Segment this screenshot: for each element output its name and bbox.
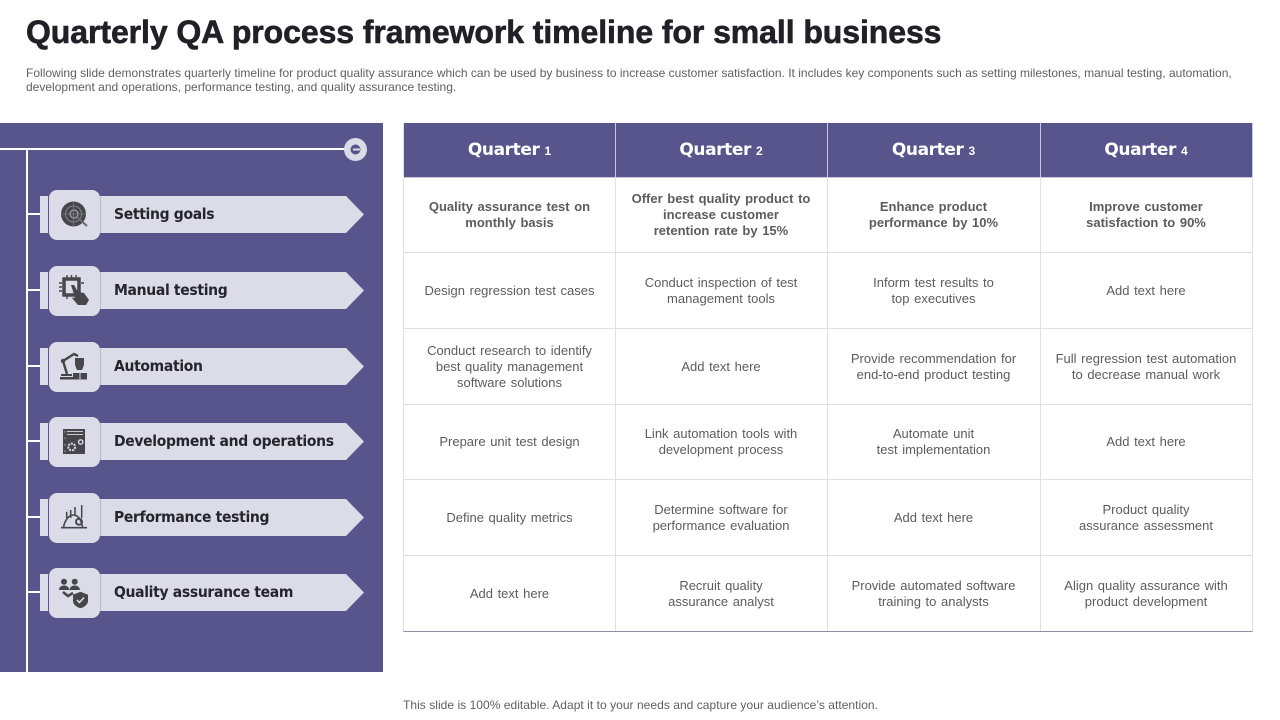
- icon: gauge with bars: [49, 493, 100, 543]
- table: quarterly plan: [403, 123, 1253, 632]
- table: quarterly plan: assurance analyst: [668, 594, 774, 609]
- table: quarterly plan: Inform test results to: [873, 275, 994, 290]
- header: quarter 1: Quarter 1: [468, 140, 551, 160]
- header: quarter 4: [1040, 123, 1253, 178]
- table: quarterly plan: Add text here: [470, 586, 549, 601]
- item: quality assurance team: [40, 568, 364, 618]
- table: quarterly plan: software solutions: [457, 375, 562, 390]
- table: quarterly plan: Align quality assurance with: [1064, 578, 1228, 593]
- label: Performance testing: [114, 508, 269, 526]
- table: quarterly plan: top executives: [891, 291, 976, 306]
- table: quarterly plan: Automate unit: [893, 426, 974, 441]
- header: quarter 1: [403, 123, 616, 178]
- item: development and operations: [40, 417, 364, 467]
- item: setting goals: [40, 190, 364, 240]
- label: Development and operations: [114, 432, 334, 450]
- panel: QA components timeline: [0, 123, 383, 672]
- icon: chip with pointing hand: [49, 266, 100, 316]
- table: quarterly plan: Define quality metrics: [446, 510, 573, 525]
- table: quarterly plan: Add text here: [681, 359, 761, 374]
- header: quarter 2: Quarter 2: [679, 140, 763, 160]
- header: quarter 3: [827, 123, 1041, 178]
- table: quarterly plan: Prepare unit test design: [439, 434, 580, 449]
- icon: target with magnifier: [49, 190, 100, 240]
- table: quarterly plan: Conduct research to identify: [427, 343, 592, 358]
- table: quarterly plan: best quality management: [436, 359, 583, 374]
- table: quarterly plan: monthly basis: [465, 214, 554, 230]
- table: quarterly plan: Quality assurance test on: [429, 198, 590, 214]
- table: quarterly plan: to decrease manual work: [1072, 367, 1220, 382]
- icon: robot arm and boxes: [49, 342, 100, 392]
- label: Setting goals: [114, 205, 214, 223]
- label: Quality assurance team: [114, 583, 293, 601]
- table: quarterly plan: Add text here: [1106, 283, 1186, 298]
- title: Quarterly QA process framework timeline for small business: [26, 14, 941, 50]
- intro text: Following slide demonstrates quarterly timeline for product quality assurance which can be used by business to increase customer satisfaction. It includes key components such as setting milestones, manual testing, automation, development and operations, performance testing, and quality assurance testing.: [26, 66, 1232, 94]
- table: quarterly plan: Provide automated software: [852, 578, 1015, 593]
- label: Manual testing: [114, 281, 227, 299]
- item: performance testing: [40, 493, 364, 543]
- icon: team with shield: [49, 568, 100, 618]
- table: quarterly plan: increase customer: [663, 206, 779, 222]
- table: quarterly plan: Determine software for: [654, 502, 788, 517]
- table: quarterly plan: training to analysts: [878, 594, 989, 609]
- table: quarterly plan: Improve customer: [1089, 198, 1203, 214]
- table: quarterly plan: Add text here: [1106, 434, 1186, 449]
- table: quarterly plan: assurance assessment: [1079, 518, 1213, 533]
- item: automation: [40, 342, 364, 392]
- item: manual testing: [40, 266, 364, 316]
- table: quarterly plan: satisfaction to 90%: [1086, 214, 1206, 230]
- header: quarter 3: Quarter 3: [892, 140, 975, 160]
- table: quarterly plan: Offer best quality product to: [632, 190, 810, 206]
- table: quarterly plan: Link automation tools with: [645, 426, 797, 441]
- table: quarterly plan: Conduct inspection of test: [645, 275, 797, 290]
- footer note: This slide is 100% editable. Adapt it to your needs and capture your audience’s attention.: [403, 698, 878, 712]
- header: quarter 2: [615, 123, 828, 178]
- table: quarterly plan: test implementation: [877, 442, 990, 457]
- table: quarterly plan: Enhance product: [880, 198, 987, 214]
- table: quarterly plan: Design regression test cases: [425, 283, 594, 298]
- table: quarterly plan: Full regression test automation: [1056, 351, 1236, 366]
- label: Automation: [114, 357, 203, 375]
- table: quarterly plan: end-to-end product testing: [857, 367, 1010, 382]
- table: quarterly plan: product development: [1085, 594, 1207, 609]
- table: quarterly plan: retention rate by 15%: [654, 222, 788, 238]
- table: quarterly plan: performance by 10%: [869, 214, 998, 230]
- table: quarterly plan: development process: [659, 442, 783, 457]
- icon: timeline start marker: [344, 138, 367, 161]
- table: quarterly plan: management tools: [667, 291, 775, 306]
- table: quarterly plan: Recruit quality: [679, 578, 763, 593]
- table: quarterly plan: Add text here: [894, 510, 973, 525]
- icon: book with gears: [49, 417, 100, 467]
- table: quarterly plan: performance evaluation: [653, 518, 789, 533]
- table: quarterly plan: Product quality: [1102, 502, 1189, 517]
- table: quarterly plan: Provide recommendation for: [851, 351, 1016, 366]
- header: quarter 4: Quarter 4: [1104, 140, 1188, 160]
